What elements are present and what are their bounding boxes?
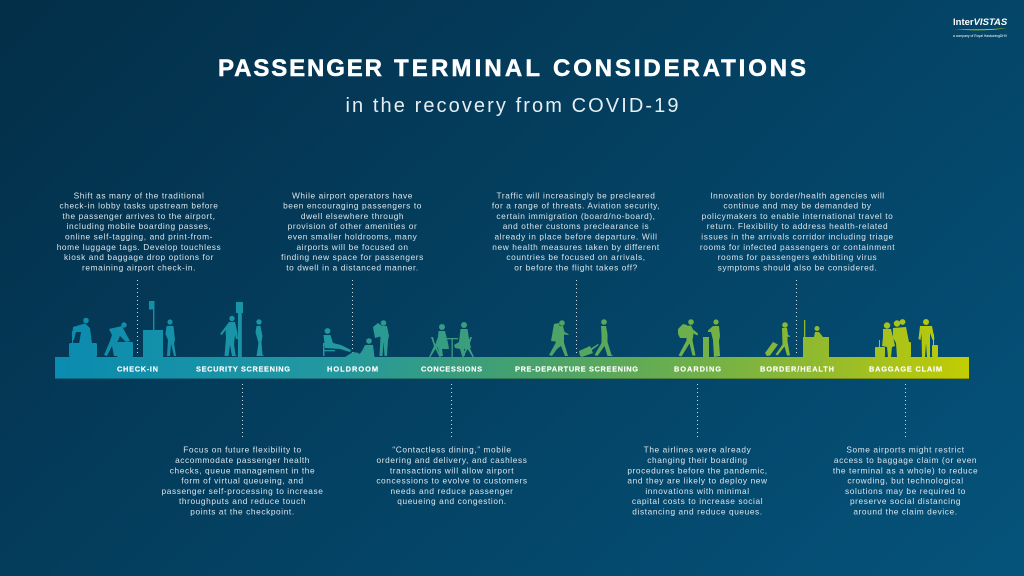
text block: border/health: policymakers to enable international travel to xyxy=(702,211,893,221)
text block: holdroom: been encouraging passengers to xyxy=(283,201,422,211)
stage labels xyxy=(117,364,942,374)
silhouettes: security screening xyxy=(220,302,264,357)
text block: border/health: Innovation by border/health agencies will xyxy=(710,190,885,200)
text block: check-in xyxy=(57,190,221,272)
text block: border/health: return. Flexibility to address health-related xyxy=(707,221,888,231)
stage labels: BAGGAGE CLAIM xyxy=(869,364,942,374)
text block: check-in: home luggage tags. Develop touchless xyxy=(57,242,221,252)
stage labels: SECURITY SCREENING xyxy=(196,364,290,374)
text block: boarding: procedures before the pandemic, xyxy=(627,465,768,475)
text block: pre-departure screening: Traffic will increasingly be precleared xyxy=(497,190,655,200)
text block: boarding: and they are likely to deploy new xyxy=(627,476,768,486)
text block: pre-departure screening: or before the flight takes off? xyxy=(514,262,638,272)
text block: baggage claim: the terminal as a whole) to reduce xyxy=(833,465,978,475)
text block: holdroom: provision of other amenities or xyxy=(288,221,417,231)
text block: concessions: ordering and delivery, and cashless xyxy=(377,455,527,465)
text block: pre-departure screening: and other customs preclearance is xyxy=(503,221,649,231)
text block: holdroom: even smaller holdrooms, many xyxy=(288,232,418,242)
text block: concessions: “Contactless dining,” mobile xyxy=(392,445,512,455)
timeline bar xyxy=(55,357,969,379)
text block: check-in: including mobile boarding passes, xyxy=(67,221,211,231)
text block: holdroom xyxy=(281,190,424,272)
text block: border/health: symptoms should also be considered. xyxy=(718,262,877,272)
text block: check-in: remaining airport check-in. xyxy=(82,262,196,272)
text block: boarding xyxy=(627,445,768,516)
text block: security screening: passenger self-processing to increase xyxy=(162,486,323,496)
text block: border/health: rooms for infected passengers or containment xyxy=(700,242,895,252)
text block: check-in: kiosk and baggage drop options for xyxy=(64,252,214,262)
text block: boarding: innovations with minimal xyxy=(645,486,750,496)
text block: pre-departure screening: certain immigration (board/no-board), xyxy=(496,211,656,221)
text block: holdroom: finding new space for passengers xyxy=(281,252,424,262)
stage labels: BOARDING xyxy=(674,364,721,374)
text block: security screening: points at the checkpoint. xyxy=(190,507,295,517)
text block: border/health: continue and may be demanded by xyxy=(723,201,872,211)
stage labels: PRE-DEPARTURE SCREENING xyxy=(515,364,638,374)
text block: baggage claim: solutions may be required to xyxy=(845,486,966,496)
text block: security screening: checks, queue management in the xyxy=(170,465,315,475)
text block: concessions: concessions to evolve to customers xyxy=(376,476,528,486)
text block: border/health: issues in the arrivals corridor including triage xyxy=(701,232,894,242)
text block: holdroom: to dwell in a distanced manner. xyxy=(286,262,419,272)
text block: holdroom: dwell elsewhere through xyxy=(301,211,404,221)
text block: boarding: changing their boarding xyxy=(647,455,748,465)
title xyxy=(218,55,806,82)
text block: security screening: Focus on future flexibility to xyxy=(183,445,302,455)
text block: pre-departure screening xyxy=(492,190,660,272)
text block: baggage claim: Some airports might restrict xyxy=(846,445,965,455)
text block: concessions: needs and reduce passenger xyxy=(390,486,514,496)
logo: InterVISTAS xyxy=(953,17,1008,38)
text block: holdroom: airports will be focused on xyxy=(296,242,409,252)
text block: security screening: accommodate passenger health xyxy=(175,455,310,465)
text block: border/health: rooms for passengers exhibiting virus xyxy=(718,252,877,262)
text block: check-in: Shift as many of the traditional xyxy=(74,190,204,200)
subtitle: in the recovery from COVID-19 xyxy=(346,95,678,117)
text block: pre-departure screening: new health measures taken by different xyxy=(492,242,660,252)
title: CONSIDERATIONS xyxy=(553,55,806,82)
text block: pre-departure screening: countries be focused on arrivals, xyxy=(506,252,646,262)
text block: check-in: online self-tagging, and print-from- xyxy=(65,232,213,242)
text block: security screening: form of virtual queueing, and xyxy=(181,476,304,486)
text block: baggage claim xyxy=(833,445,978,516)
text block: boarding: distancing and reduce queues. xyxy=(632,507,763,517)
text block: check-in: the passenger arrives to the airport, xyxy=(62,211,216,221)
silhouettes: boarding xyxy=(678,319,720,357)
text block: security screening: throughputs and reduce touch xyxy=(179,496,306,506)
stage labels: CONCESSIONS xyxy=(421,364,482,374)
logo: InterVISTAS: InterVISTAS xyxy=(953,17,1008,28)
text block: concessions: queueing and congestion. xyxy=(397,496,507,506)
text block: pre-departure screening: already in place before departure. Will xyxy=(494,232,658,242)
text block: pre-departure screening: for a range of threats. Aviation security, xyxy=(492,201,660,211)
stage labels: HOLDROOM xyxy=(327,364,378,374)
text block: baggage claim: around the claim device. xyxy=(853,507,958,517)
dotted leader lines xyxy=(138,280,906,440)
silhouettes: check-in xyxy=(69,301,176,357)
silhouettes: holdroom xyxy=(323,320,389,357)
text block: baggage claim: crowding, but technological xyxy=(847,476,964,486)
title: TERMINAL xyxy=(394,55,540,82)
text block: boarding: The airlines were already xyxy=(644,445,752,455)
text block: baggage claim: access to baggage claim (or even xyxy=(834,455,977,465)
text block: security screening xyxy=(162,445,323,516)
stage labels: BORDER/HEALTH xyxy=(760,364,834,374)
silhouettes: border/health xyxy=(765,320,829,357)
silhouettes: pre-departure screening xyxy=(549,319,614,357)
title: PASSENGER xyxy=(218,55,382,82)
text block: check-in: check-in lobby tasks upstream before xyxy=(59,201,219,211)
silhouettes: baggage claim xyxy=(875,319,938,357)
text block: concessions xyxy=(376,445,528,506)
text block: holdroom: While airport operators have xyxy=(292,190,413,200)
text block: concessions: transactions will allow airport xyxy=(390,465,514,475)
stage labels: CHECK-IN xyxy=(117,364,158,374)
text block: border/health xyxy=(700,190,895,272)
logo: InterVISTAS: a company of Royal HaskoningDHV xyxy=(953,34,1008,38)
text block: baggage claim: preserve social distancing xyxy=(850,496,961,506)
silhouettes: concessions xyxy=(429,322,474,357)
text block: boarding: capital costs to increase social xyxy=(632,496,763,506)
